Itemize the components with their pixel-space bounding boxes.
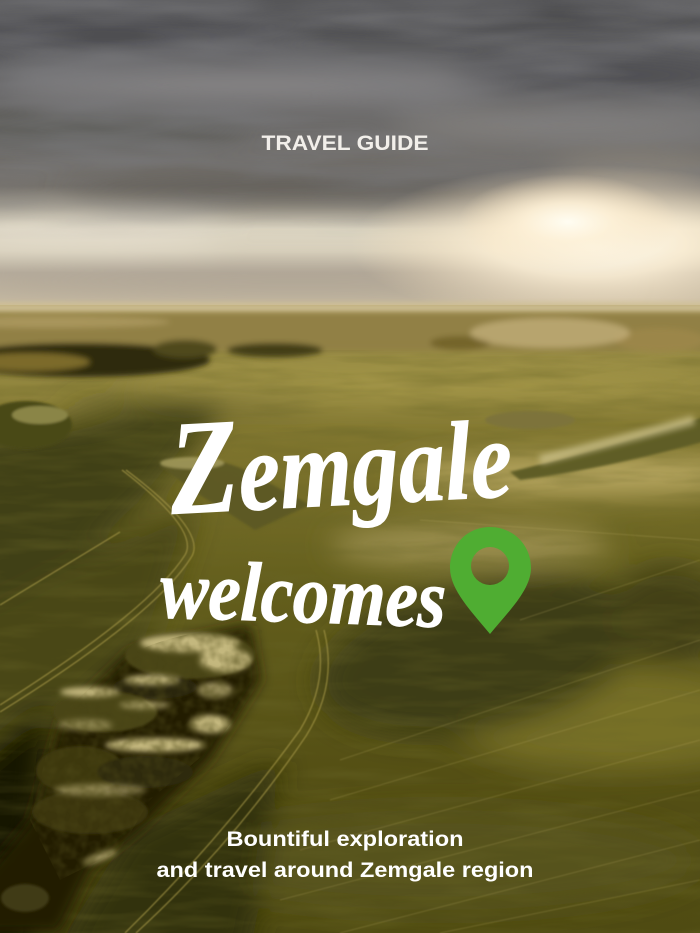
heading: travel guide: TRAVEL GUIDE [262,132,428,155]
tagline line 2: and travel around Zemgale region [156,859,534,882]
title: welcomes: welcomes [159,543,448,646]
sky with clouds [0,0,700,325]
icon: green map pin [450,527,531,634]
tyre tracks [0,470,328,933]
title: Zemgale: Zemgale [165,377,515,544]
distant tree line [0,303,700,530]
tagline line 1: Bountiful exploration [226,828,464,851]
fields [0,305,700,933]
hedgerow bushes [0,620,270,933]
